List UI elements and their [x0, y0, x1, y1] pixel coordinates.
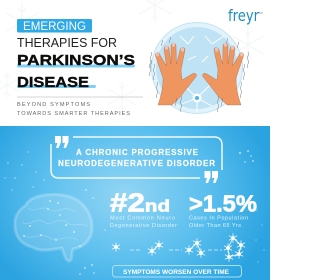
panel: blue disorder section [0, 126, 270, 280]
stat: >1.5% [189, 190, 257, 229]
label: symptoms worsen over time: SYMPTOMS WORSEN OVER TIME [123, 269, 230, 276]
particles [4, 150, 265, 275]
background: faint top decoration [0, 0, 264, 112]
callout text: NEURODEGENERATIVE DISORDER [58, 159, 215, 168]
subtitle: BEYOND SYMPTOMS [17, 102, 90, 108]
icon: opening quote mark [55, 136, 68, 148]
logo: freyr: freyr [228, 6, 259, 25]
heading: therapies for: THERAPIES FOR [17, 36, 117, 50]
stat: #2nd [110, 188, 177, 229]
logo: freyr: TM [259, 12, 263, 15]
tremor lines [149, 37, 249, 112]
icon: closing quote mark [204, 171, 218, 183]
right hand [203, 43, 244, 105]
heading: Parkinson's: PARKINSON’S [17, 52, 135, 69]
illustration: trembling hands over neuron circle [149, 22, 249, 114]
stat: #2nd: Degenerative Disorder [110, 223, 177, 229]
label: symptoms worsen over time [112, 266, 242, 277]
stat: #2nd: #2 nd [110, 188, 170, 218]
stat: >1.5%: Older Than 65 Yrs [189, 223, 241, 229]
subtitle: TOWARDS SMARTER THERAPIES [17, 111, 130, 117]
subtitle [17, 97, 143, 117]
stat: #2nd: Most Common Neuro [110, 216, 175, 222]
quote frame [51, 137, 222, 178]
stat: >1.5%: >1.5% [189, 190, 257, 216]
left hand [155, 43, 196, 105]
stat: >1.5%: Cases In Population [189, 216, 248, 222]
finger tips [156, 42, 243, 56]
callout text: A CHRONIC PROGRESSIVE [76, 148, 199, 157]
icon: brain [15, 194, 92, 261]
callout text [58, 148, 215, 168]
neurons [178, 36, 226, 112]
heading: disease: DISEASE [17, 74, 89, 91]
timeline: spreading neurons [112, 234, 245, 261]
badge: EMERGING: EMERGING [23, 21, 86, 33]
